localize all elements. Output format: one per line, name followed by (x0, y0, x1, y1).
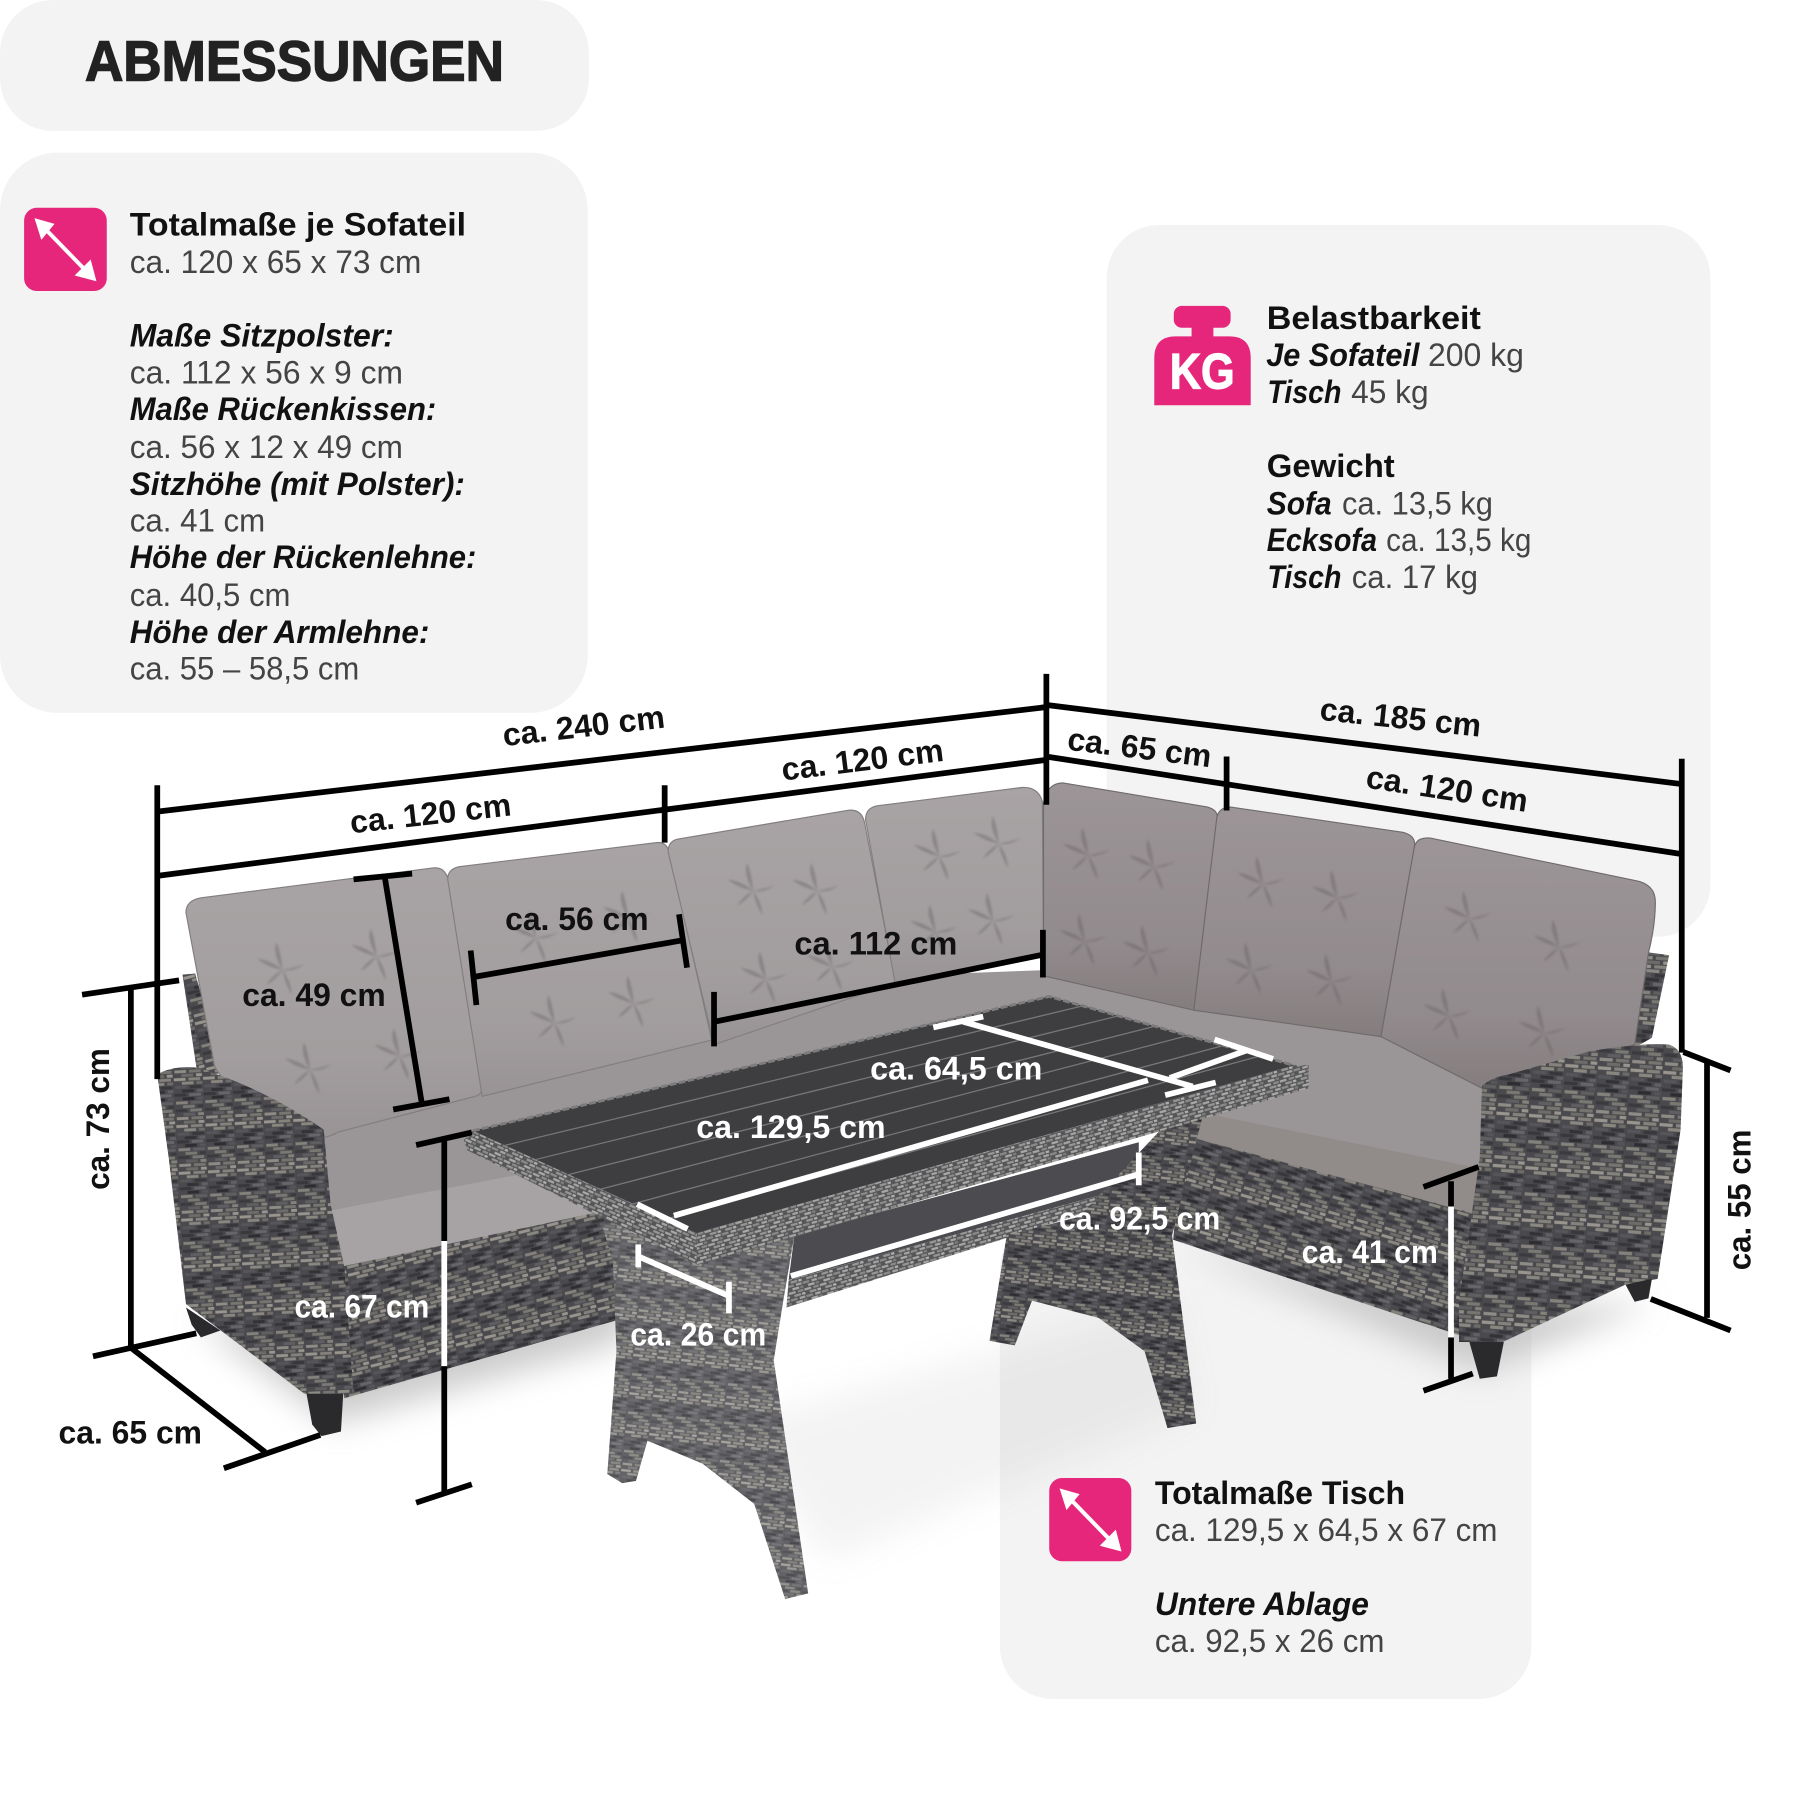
text block: sofa measurements: Totalmaße je Sofateil (130, 206, 466, 242)
dimension labels: ca. 120 cm (1364, 759, 1530, 819)
text block: sofa measurements: Höhe der Armlehne: (130, 614, 429, 650)
left armrest (157, 1067, 354, 1394)
title: ABMESSUNGEN (85, 29, 504, 92)
left table leg (602, 1223, 808, 1599)
back cushion 4 (866, 787, 1043, 985)
right back wicker (1630, 952, 1669, 1050)
dimension labels: ca. 56 cm (505, 901, 649, 937)
table rim left (464, 1131, 697, 1265)
dimension labels: ca. 120 cm (779, 732, 946, 788)
cushion tufts (257, 816, 1581, 1094)
text block: sofa measurements: Maße Sitzpolster: (130, 318, 394, 354)
text block: sofa measurements: ca. 41 cm (130, 503, 265, 539)
text block: load capacity and weight (1266, 300, 1531, 595)
dimension labels: ca. 240 cm (501, 699, 667, 753)
dimension labels: ca. 112 cm (794, 926, 957, 962)
text block: sofa measurements: ca. 56 x 12 x 49 cm (130, 429, 403, 465)
panel: table measurements background (1000, 1217, 1531, 1699)
text block: load capacity and weight: 200 kg (1428, 337, 1524, 373)
icon: sofa dimensions arrow (24, 208, 107, 291)
table rim right (697, 1065, 1309, 1265)
text block: sofa measurements: Höhe der Rückenlehne: (130, 539, 476, 575)
text block: table measurements (1155, 1475, 1498, 1659)
dimension labels: ca. 41 cm (1302, 1234, 1438, 1270)
back cushion 6 (1194, 807, 1415, 1037)
text block: table measurements: Totalmaße Tisch (1155, 1475, 1405, 1511)
text block: table measurements: ca. 92,5 x 26 cm (1155, 1623, 1384, 1659)
table top (473, 996, 1294, 1233)
dimension labels: ca. 65 cm (59, 1415, 202, 1451)
right base wicker (1173, 1131, 1481, 1339)
text block: sofa measurements: Maße Rückenkissen: (130, 391, 436, 427)
panel: title background (0, 0, 589, 131)
dimension labels: ca. 64,5 cm (870, 1051, 1042, 1087)
black dimension lines (82, 674, 1731, 1503)
right seat front (1188, 1111, 1492, 1217)
text block: sofa measurements: ca. 120 x 65 x 73 cm (130, 244, 421, 280)
left back wicker (183, 973, 224, 1074)
back cushion 1 (186, 868, 482, 1139)
dimension labels: ca. 65 cm (1066, 721, 1214, 774)
dimension labels: ca. 73 cm (80, 1048, 116, 1190)
text block: load capacity and weight: Tisch (1267, 374, 1341, 410)
dimension labels: ca. 92,5 cm (1059, 1200, 1220, 1236)
sofa (157, 783, 1683, 1436)
text block: load capacity and weight: Je Sofateil (1266, 337, 1420, 373)
icon: KG weight (1154, 306, 1251, 405)
text block: load capacity and weight: Sofa (1267, 485, 1332, 521)
back cushion 3 (668, 810, 895, 1045)
text block: load capacity and weight: ca. 13,5 kg (1386, 522, 1531, 558)
dimension labels: ca. 55 cm (1722, 1130, 1758, 1270)
text block: load capacity and weight: ca. 13,5 kg (1342, 485, 1493, 521)
dimension labels: ca. 49 cm (242, 977, 386, 1013)
back cushion 7 (1381, 838, 1655, 1091)
dimension labels: ca. 129,5 cm (696, 1109, 886, 1145)
dimension labels: ca. 67 cm (294, 1288, 429, 1324)
dimension labels: ca. 120 cm (348, 787, 513, 840)
text block: load capacity and weight: Tisch (1267, 559, 1341, 595)
shelf rim (786, 1185, 1139, 1308)
icon: KG weight: KG (1170, 343, 1235, 400)
text block: sofa measurements: ca. 40,5 cm (130, 577, 290, 613)
text block: table measurements: Untere Ablage (1155, 1586, 1369, 1622)
sofa legs (186, 1279, 1652, 1436)
panel: load capacity background (1107, 225, 1710, 937)
text block: sofa measurements: ca. 112 x 56 x 9 cm (130, 354, 403, 390)
table shelf (789, 1142, 1139, 1280)
text block: load capacity and weight: Ecksofa (1267, 522, 1377, 558)
text block: load capacity and weight: Gewicht (1267, 448, 1395, 484)
text block: sofa measurements (130, 206, 476, 687)
left seat front (321, 1164, 620, 1270)
right armrest (1459, 1044, 1683, 1342)
back cushion 5 (1043, 783, 1217, 1010)
left base wicker (327, 1205, 629, 1398)
left table leg highlight (602, 1223, 808, 1599)
dimension labels: ca. 26 cm (630, 1316, 766, 1352)
text block: sofa measurements: Sitzhöhe (mit Polster): (130, 466, 465, 502)
text block: table measurements: ca. 129,5 x 64,5 x 67 cm (1155, 1512, 1498, 1548)
panel: sofa measurements background (0, 153, 588, 713)
text block: load capacity and weight: Belastbarkeit (1267, 300, 1481, 336)
right table leg (990, 1119, 1202, 1428)
text block: load capacity and weight: 45 kg (1351, 374, 1429, 410)
dimension labels: ca. 185 cm (1318, 691, 1483, 744)
floor shadow (195, 1246, 1653, 1561)
dimension labels (59, 691, 1758, 1451)
table board stripes (504, 1006, 1259, 1219)
table top rim back (473, 996, 1294, 1131)
icon: table dimensions arrow (1049, 1478, 1131, 1561)
white dimension lines (444, 1017, 1451, 1366)
dining table (464, 996, 1309, 1599)
text block: load capacity and weight: ca. 17 kg (1352, 559, 1478, 595)
seat cushions top (310, 970, 1492, 1215)
text block: sofa measurements: ca. 55 – 58,5 cm (130, 651, 359, 687)
back cushion 2 (448, 842, 712, 1096)
